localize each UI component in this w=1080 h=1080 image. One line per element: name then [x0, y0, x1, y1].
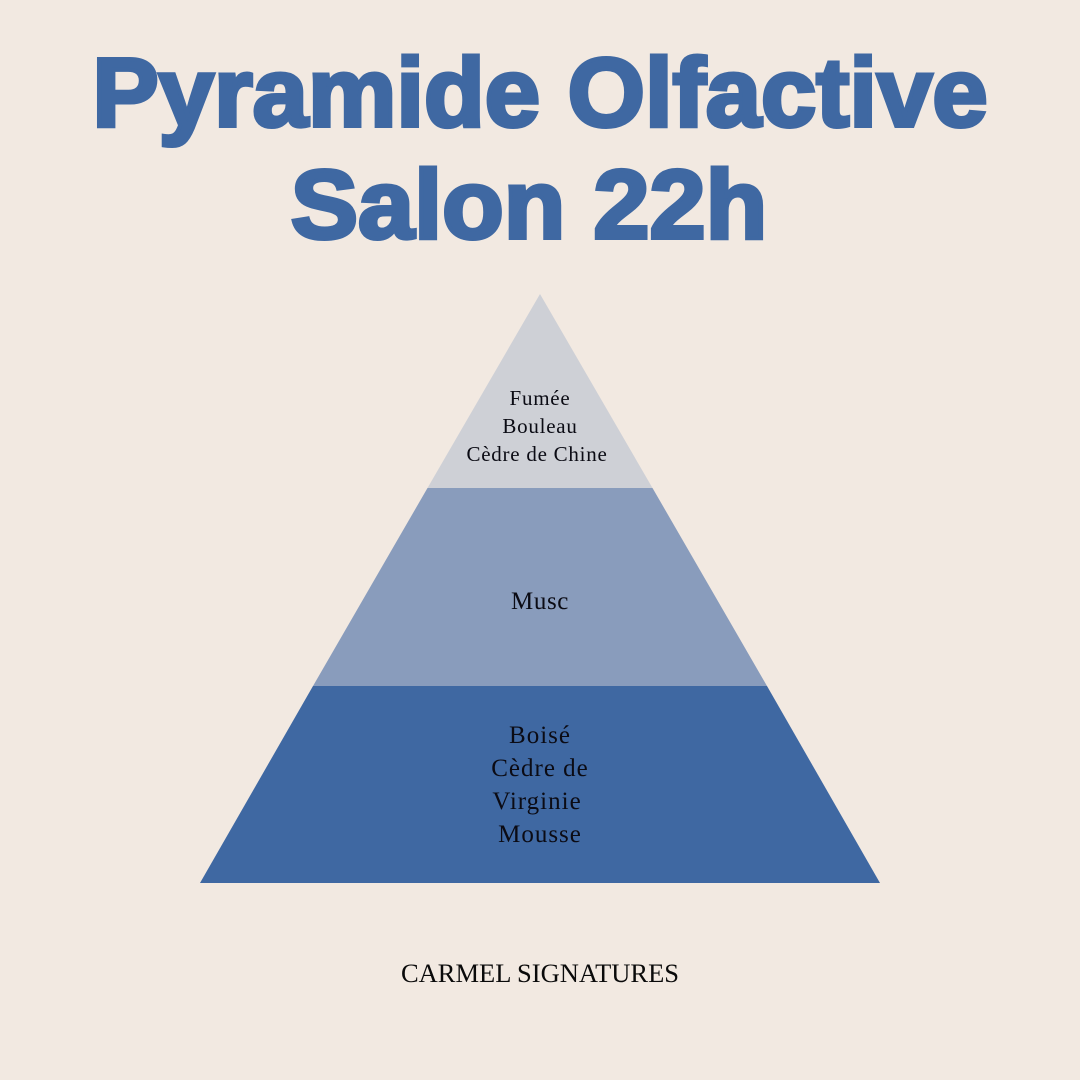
base notes text: Virginie	[492, 788, 582, 815]
base notes text	[491, 722, 589, 848]
top notes text: Fumée	[510, 386, 570, 410]
base notes text: Mousse	[498, 821, 582, 848]
top notes text: Bouleau	[502, 414, 578, 438]
pyramid tier: top	[428, 294, 652, 488]
base notes text: Cèdre de	[491, 755, 589, 782]
pyramid tier: middle	[313, 488, 767, 686]
top notes text	[466, 386, 608, 466]
title: Salon 22h	[291, 150, 767, 259]
title: Pyramide Olfactive	[92, 38, 988, 147]
base notes text: Boisé	[509, 722, 571, 749]
brand footer: CARMEL SIGNATURES	[401, 958, 679, 988]
heart notes text: Musc	[511, 588, 569, 615]
top notes text: Cèdre de Chine	[466, 442, 608, 466]
pyramid tier: base	[200, 686, 880, 883]
title	[92, 38, 988, 259]
